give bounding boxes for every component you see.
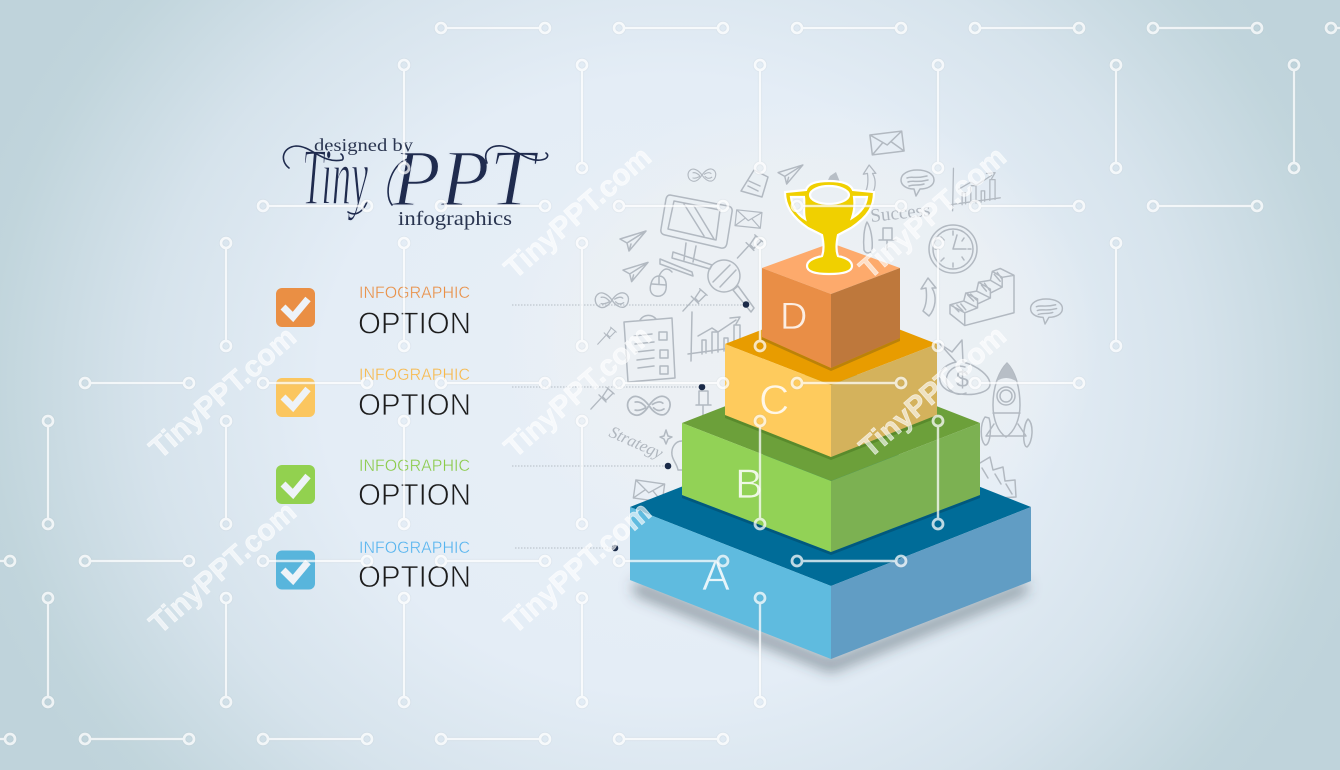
vertical column x1116 <box>1115 70 1117 341</box>
icon: stairs <box>980 457 1016 499</box>
block B <box>682 365 980 555</box>
horizontal row y383 <box>90 382 1074 384</box>
icon: infinity <box>595 293 628 308</box>
label A: INFOGRAPHIC <box>359 539 470 557</box>
icon: infinity <box>628 396 670 415</box>
leader: option A <box>515 545 618 551</box>
rocket porthole <box>997 363 1016 405</box>
value C: OPTION <box>358 387 471 422</box>
watermark 1: TinyPPT.com <box>143 320 303 465</box>
logo script: PPT: PPT <box>391 135 539 223</box>
watermark 7: TinyPPT.com <box>853 319 1013 464</box>
option C <box>276 366 471 422</box>
block A <box>630 428 1031 659</box>
icon: infinity <box>688 169 716 181</box>
doodle word: Strategy: Strategy <box>606 422 666 463</box>
vertical column x226 <box>225 248 227 697</box>
watermark 3: TinyPPT.com <box>498 140 658 285</box>
value B: OPTION <box>358 477 471 512</box>
label D: INFOGRAPHIC <box>359 284 470 302</box>
icon: computer monitor <box>660 195 732 276</box>
icon: plane <box>778 165 803 184</box>
block D <box>762 243 900 371</box>
icon: light bulb <box>672 441 688 470</box>
letter C: C <box>759 376 789 423</box>
letter D: D <box>780 296 807 338</box>
vertical column x760 <box>759 70 761 697</box>
icon: push pin <box>737 235 763 258</box>
logo text: designed by: designed by <box>314 135 413 155</box>
icon: tag <box>741 170 768 197</box>
icon: plane <box>620 231 646 251</box>
option B <box>276 457 471 512</box>
icon: envelope <box>870 131 904 155</box>
leader: option B <box>512 463 671 469</box>
value A: OPTION <box>358 559 471 594</box>
watermark 2: TinyPPT.com <box>143 495 303 640</box>
block C <box>725 303 937 460</box>
icon: rocket <box>981 363 1032 447</box>
icon: star <box>660 430 672 444</box>
icon: rising chart <box>688 312 746 361</box>
icon: speech bubble <box>1031 299 1062 324</box>
watermarks <box>143 140 1013 640</box>
pale haze behind doodles <box>500 100 1100 580</box>
option A <box>276 539 471 594</box>
logo text: infographics: infographics <box>398 208 512 230</box>
icon: clipboard <box>624 315 675 382</box>
icon: money bag <box>940 340 990 395</box>
vertical column x1294 <box>1293 70 1295 163</box>
panel: option list <box>276 284 471 594</box>
icon: push pin <box>598 327 616 344</box>
small rocket tip <box>826 172 840 184</box>
icon: small rocket <box>864 222 872 253</box>
icon: curved arrow <box>863 165 876 197</box>
title logo <box>283 134 548 230</box>
icon: speech bubble <box>901 170 934 196</box>
icon: pin <box>879 228 896 250</box>
icon: stairs <box>950 268 1014 326</box>
letter B: B <box>735 460 763 507</box>
clock hands <box>935 231 971 267</box>
doodle word: Success: Success <box>869 200 931 227</box>
shadow under pyramid <box>634 580 1027 672</box>
checkbox orange <box>276 288 315 327</box>
pyramid chart <box>630 181 1031 672</box>
title logo: Tiny <box>302 134 368 222</box>
watermark 6: TinyPPT.com <box>853 140 1013 285</box>
icon: mouse <box>650 269 672 296</box>
vertical column x582 <box>581 70 583 697</box>
watermark 5: TinyPPT.com <box>498 495 658 640</box>
value D: OPTION <box>358 306 471 340</box>
icon: rising chart <box>950 168 1000 211</box>
vertical column x48 <box>47 426 49 697</box>
icon: envelope <box>633 480 665 502</box>
leader: option D <box>512 301 749 308</box>
label C: INFOGRAPHIC <box>359 366 470 384</box>
icon: envelope <box>735 210 762 228</box>
connector leader lines <box>512 301 749 551</box>
icon: plane <box>623 262 648 282</box>
doodle background <box>591 131 1062 502</box>
icon: clock <box>929 225 977 273</box>
letter A: A <box>702 552 730 599</box>
icon: push pin <box>591 388 614 409</box>
icon: trophy <box>785 181 874 274</box>
checkbox blue <box>276 550 315 590</box>
leader: option C <box>512 384 705 390</box>
icon: push pin <box>696 391 711 418</box>
checkbox green <box>276 465 315 504</box>
option D <box>276 284 471 340</box>
vertical column x404 <box>403 70 405 697</box>
label B: INFOGRAPHIC <box>359 457 470 475</box>
checkbox yellow <box>276 378 315 417</box>
dollar sign on money bag: $ <box>956 366 969 392</box>
horizontal row y561 <box>0 560 896 562</box>
icon: magnifier <box>708 260 754 312</box>
logo flourishes <box>283 146 548 214</box>
horizontal row y739 <box>0 738 718 740</box>
vertical column x938 <box>937 70 939 519</box>
icon: curved arrow <box>921 278 936 316</box>
watermark 4: TinyPPT.com <box>498 319 658 464</box>
horizontal row y206 <box>268 205 1252 207</box>
horizontal row y28 <box>446 27 1340 29</box>
doodles behind trophy <box>826 172 931 253</box>
icon: push pin <box>683 289 707 311</box>
